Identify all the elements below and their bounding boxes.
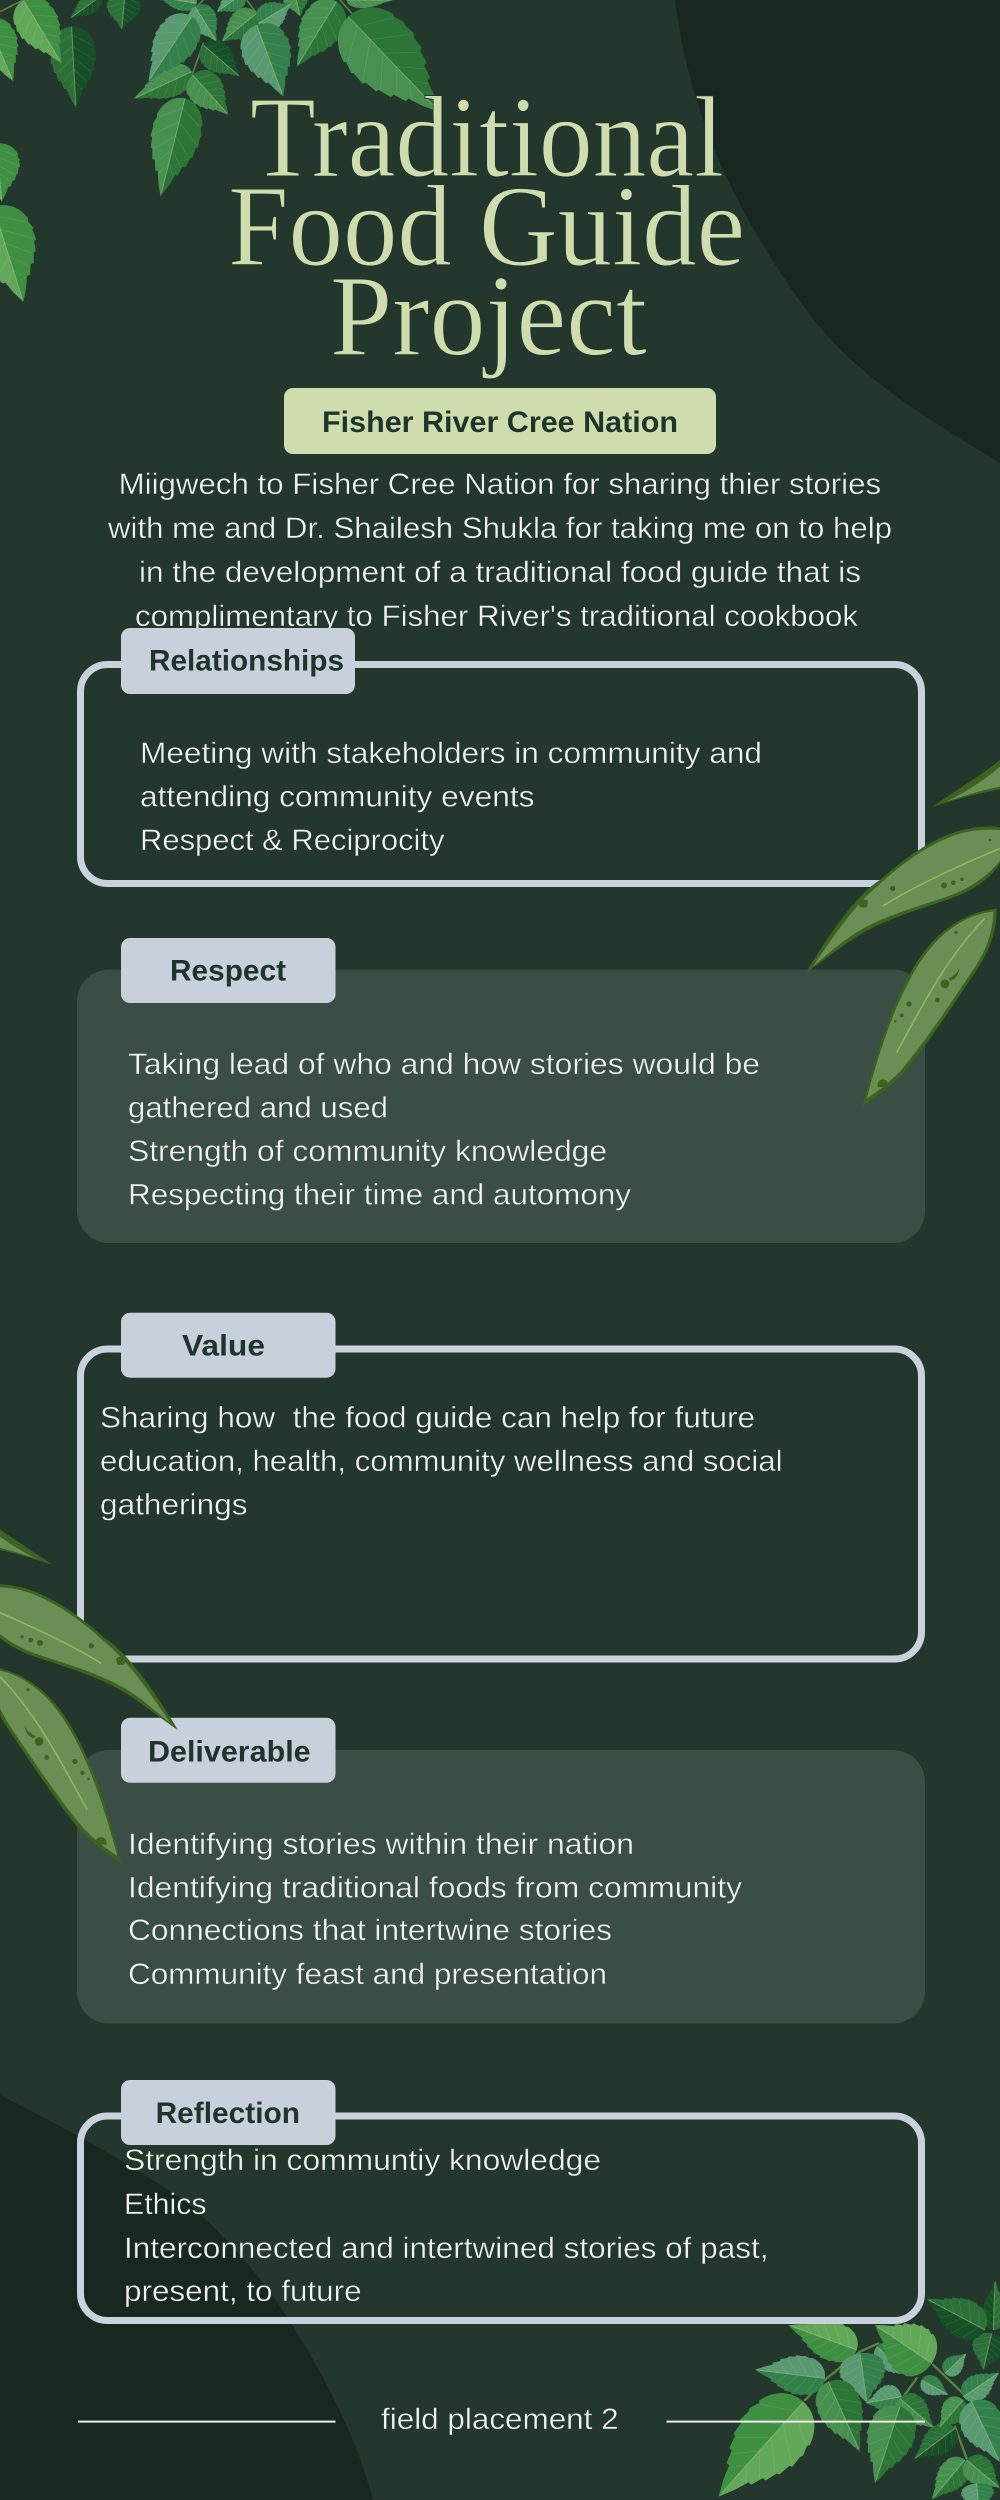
background shape: top right curve bbox=[675, 0, 1000, 463]
title bbox=[228, 74, 745, 380]
label: value: Value bbox=[182, 1329, 265, 1362]
subtitle badge: Fisher River Cree Nation bbox=[322, 406, 678, 439]
label: respect bbox=[121, 938, 336, 1003]
panel border bbox=[80, 2116, 922, 2320]
intro text: Miigwech to Fisher Cree Nation for sharing thier stories bbox=[119, 468, 881, 501]
reflection text: Interconnected and intertwined stories of past, bbox=[124, 2232, 768, 2265]
intro text: in the development of a traditional food guide that is bbox=[139, 556, 861, 589]
respect text: Respecting their time and automony bbox=[128, 1179, 631, 1212]
reflection text bbox=[124, 2144, 768, 2308]
relationships text: Respect & Reciprocity bbox=[140, 824, 444, 857]
title: Traditional bbox=[250, 74, 724, 202]
panel: deliverable bbox=[77, 1718, 925, 2024]
panel border bbox=[80, 1349, 922, 1659]
value text bbox=[100, 1402, 782, 1522]
panel: reflection bbox=[80, 2080, 922, 2320]
reflection text: Ethics bbox=[124, 2188, 207, 2221]
foliage: left illustrated leaves bbox=[0, 1517, 178, 1863]
reflection text: present, to future bbox=[124, 2275, 362, 2308]
panel background bbox=[77, 1750, 925, 2024]
intro text: with me and Dr. Shailesh Shukla for taking me on to help bbox=[107, 512, 892, 545]
panel background bbox=[77, 970, 925, 1243]
subtitle badge bbox=[284, 388, 716, 454]
panel border bbox=[80, 664, 922, 884]
footer: field placement 2 bbox=[381, 2403, 619, 2436]
foliage: right illustrated leaves bbox=[806, 760, 1000, 1106]
label: reflection bbox=[121, 2080, 336, 2145]
title: Food Guide bbox=[228, 163, 745, 291]
background shape: bottom left curve bbox=[0, 2095, 373, 2500]
value text: Sharing how the food guide can help for future bbox=[100, 1402, 755, 1434]
label: value bbox=[121, 1313, 336, 1378]
label: relationships: Relationships bbox=[149, 645, 344, 678]
respect text: Taking lead of who and how stories would be bbox=[128, 1048, 760, 1081]
label: deliverable bbox=[121, 1718, 336, 1783]
reflection text: Strength in communtiy knowledge bbox=[124, 2144, 601, 2177]
label: deliverable: Deliverable bbox=[148, 1735, 311, 1768]
respect text bbox=[128, 1048, 760, 1212]
label: respect: Respect bbox=[170, 955, 286, 988]
relationships text bbox=[140, 737, 762, 857]
foliage: top left leaves bbox=[0, 0, 466, 312]
intro text bbox=[107, 468, 892, 633]
panel: relationships bbox=[80, 628, 922, 884]
panel: respect bbox=[77, 938, 925, 1243]
deliverable text bbox=[128, 1828, 742, 1991]
label: reflection: Reflection bbox=[156, 2097, 300, 2130]
label: relationships bbox=[121, 628, 355, 694]
deliverable text: Connections that intertwine stories bbox=[128, 1914, 612, 1947]
respect text: Strength of community knowledge bbox=[128, 1135, 607, 1168]
relationships text: Meeting with stakeholders in community and bbox=[140, 737, 762, 770]
intro text: complimentary to Fisher River's traditional cookbook bbox=[135, 600, 859, 633]
relationships text: attending community events bbox=[140, 781, 534, 814]
deliverable text: Identifying stories within their nation bbox=[128, 1828, 634, 1861]
value text: education, health, community wellness and social bbox=[100, 1445, 782, 1478]
deliverable text: Community feast and presentation bbox=[128, 1958, 607, 1991]
respect text: gathered and used bbox=[128, 1092, 388, 1124]
title: Project bbox=[330, 252, 647, 380]
panel: value bbox=[80, 1313, 922, 1659]
foliage: bottom right leaves bbox=[692, 2280, 1000, 2500]
deliverable text: Identifying traditional foods from community bbox=[128, 1871, 742, 1904]
value text: gatherings bbox=[100, 1489, 248, 1522]
